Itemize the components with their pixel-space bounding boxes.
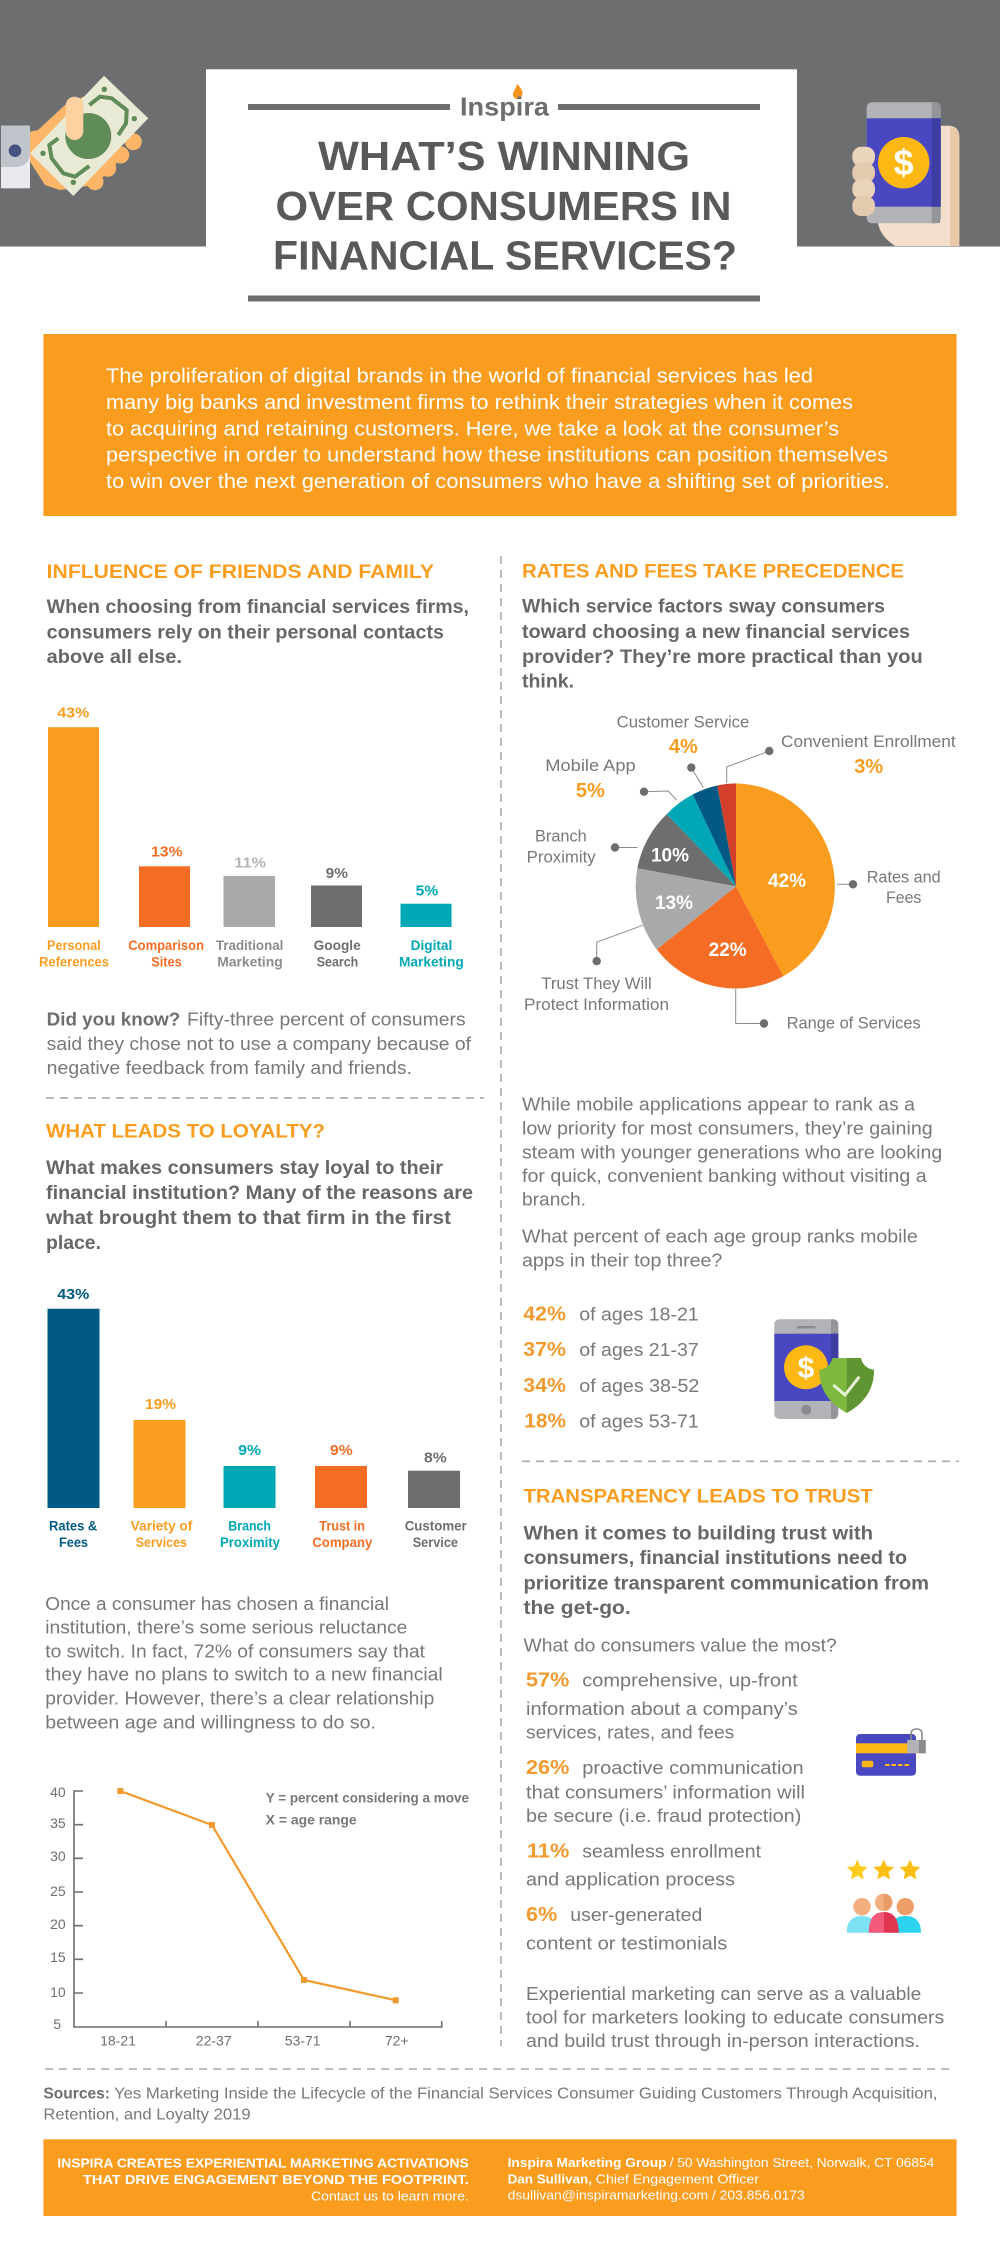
bar chart: loyalty reasons: Branch <box>228 1519 271 1534</box>
legend: Y = percent considering a move <box>266 1791 469 1806</box>
subheading: consumers rely on their personal contacts <box>47 622 444 643</box>
callout: customer service: 4% <box>669 736 698 758</box>
callout: range of services: Range of Services <box>787 1015 921 1033</box>
icon: hand holding phone: $ <box>894 142 914 183</box>
stat list: mobile app ranking by age <box>523 1304 699 1432</box>
line chart: percent considering a move by age: 72+ <box>385 2033 409 2049</box>
stat list: mobile app ranking by age: of ages 18-21 <box>579 1304 699 1325</box>
body text: reluctance to switch: Once a consumer has chosen a financial <box>45 1593 389 1614</box>
logo: Inspira: Inspira <box>460 92 550 122</box>
subheading: When it comes to building trust with <box>524 1523 873 1544</box>
icon: credit card with lock <box>856 1729 926 1776</box>
bar chart: influences: 9% <box>326 865 348 882</box>
subheading: consumers, financial institutions need to <box>524 1548 907 1569</box>
body text: mobile applications <box>522 1094 942 1271</box>
callout: mobile app: Mobile App <box>545 757 636 775</box>
title: FINANCIAL SERVICES? <box>273 232 737 278</box>
sources: Yes Marketing Inside the Lifecycle of the Financial Services Consumer Guiding Customers Through Acquisition, <box>114 2085 937 2102</box>
footer contact: Dan Sullivan, <box>508 2173 592 2187</box>
line chart: percent considering a move by age: 15 <box>50 1949 66 1965</box>
stat list: mobile app ranking by age: 34% <box>523 1375 566 1397</box>
stat list: what consumers value: 26% <box>526 1757 570 1779</box>
subheading: think. <box>522 672 574 693</box>
callout: rates and fees <box>837 868 941 907</box>
bar chart: loyalty reasons: 8% <box>424 1450 447 1467</box>
heading: WHAT LEADS TO LOYALTY? <box>46 1121 325 1143</box>
pie chart: service factors: 42% <box>768 871 806 892</box>
bar chart: influences: Digital <box>411 938 452 953</box>
callout: range of services <box>736 989 921 1033</box>
title <box>273 133 737 278</box>
sources <box>43 2085 937 2123</box>
panel: transparency leads to trust <box>524 1486 944 2051</box>
footer tagline: INSPIRA CREATES EXPERIENTIAL MARKETING ACTIVATIONS <box>57 2156 469 2170</box>
stat list: what consumers value: and application process <box>526 1869 735 1890</box>
callout: rates and fees: Fees <box>886 889 921 907</box>
intro panel <box>43 334 957 516</box>
bar chart: influences: 43% <box>57 705 89 722</box>
stat list: what consumers value: comprehensive, up-front <box>582 1670 798 1691</box>
callout: convenient enrollment: Convenient Enrollment <box>781 733 956 751</box>
bar chart: loyalty reasons: Customer <box>405 1519 467 1534</box>
intro panel: many big banks and investment firms to rethink their strategies when it comes <box>106 392 853 414</box>
subheading <box>522 597 923 693</box>
line chart: percent considering a move by age: 25 <box>50 1883 66 1899</box>
callout: branch proximity: Proximity <box>527 848 596 866</box>
icon: stars and people <box>847 1860 921 1933</box>
bar chart: influences: Marketing <box>399 955 464 970</box>
icon: phone with shield: $ <box>798 1352 815 1385</box>
heading: INFLUENCE OF FRIENDS AND FAMILY <box>47 561 434 583</box>
body text: reluctance to switch: they have no plans to switch to a new financial <box>45 1664 443 1685</box>
bar chart: loyalty reasons: Rates & <box>49 1519 98 1534</box>
bar chart: influences: Sites <box>151 955 182 970</box>
callout: convenient enrollment: 3% <box>854 756 883 778</box>
intro panel: to acquiring and retaining customers. Here, we take a look at the consumer’s <box>106 418 839 440</box>
bar chart: influences: Personal <box>47 938 101 953</box>
footer tagline: THAT DRIVE ENGAGEMENT BEYOND THE FOOTPRINT. <box>83 2173 469 2187</box>
intro panel: to win over the next generation of consumers who have a shifting set of priorities. <box>106 471 890 493</box>
callout: mobile app: 5% <box>576 780 605 802</box>
body text: mobile applications: steam with younger generations who are looking <box>522 1142 942 1163</box>
callout: trust they will protect information: Trust They Will <box>541 975 652 993</box>
callout: branch proximity <box>527 828 638 866</box>
panel: influence of friends and family <box>39 561 472 1078</box>
body text: mobile applications: for quick, convenient banking without visiting a <box>522 1165 927 1186</box>
bar chart: loyalty reasons: Service <box>413 1535 458 1550</box>
bar chart: influences: 13% <box>151 844 183 861</box>
bar chart: loyalty reasons: 9% <box>330 1442 353 1459</box>
line chart: percent considering a move by age: 20 <box>50 1916 66 1932</box>
stat list: what consumers value: 6% <box>526 1904 558 1926</box>
bar chart: loyalty reasons: 43% <box>57 1286 89 1303</box>
legend: X = age range <box>266 1813 357 1828</box>
did you know text: said they chose not to use a company because of <box>47 1033 472 1054</box>
line chart: percent considering a move by age: 22-37 <box>196 2033 232 2049</box>
body text: mobile applications: apps in their top three? <box>522 1250 722 1271</box>
subheading: prioritize transparent communication from <box>524 1573 929 1594</box>
stat list: what consumers value: content or testimonials <box>526 1932 727 1953</box>
pie chart: service factors <box>524 713 956 1033</box>
subheading <box>47 597 469 668</box>
bar chart: loyalty reasons <box>48 1286 467 1550</box>
bar chart: loyalty reasons: Proximity <box>220 1535 280 1550</box>
heading: TRANSPARENCY LEADS TO TRUST <box>524 1486 873 1508</box>
panel: what leads to loyalty <box>45 1121 473 2049</box>
callout: trust they will protect information: Protect Information <box>524 996 669 1014</box>
bar chart: loyalty reasons: 19% <box>145 1396 176 1413</box>
pie chart: service factors: 22% <box>709 940 747 961</box>
body text: experiential marketing <box>526 1983 944 2051</box>
bar chart: influences: 11% <box>234 854 266 871</box>
subheading: the get-go. <box>524 1598 631 1619</box>
callout: branch proximity: Branch <box>535 828 587 846</box>
line chart: percent considering a move by age: 10 <box>50 1984 66 2000</box>
did you know text: Fifty-three percent of consumers <box>187 1009 466 1030</box>
stat list: mobile app ranking by age: 18% <box>524 1410 566 1432</box>
bar chart: influences: Marketing <box>217 955 283 970</box>
stat list: what consumers value <box>526 1670 805 1953</box>
body text: mobile applications: What percent of each age group ranks mobile <box>522 1226 918 1247</box>
intro panel: perspective in order to understand how these institutions can position themselves <box>106 444 888 466</box>
header banner <box>0 0 1000 246</box>
line chart: percent considering a move by age: 30 <box>50 1848 66 1864</box>
body text: reluctance to switch: institution, there’s some serious reluctance <box>45 1616 407 1637</box>
legend <box>266 1791 469 1828</box>
stat list: what consumers value: 57% <box>526 1670 570 1692</box>
bar chart: influences: References <box>39 955 109 970</box>
callout: customer service: Customer Service <box>617 713 749 731</box>
callout: trust they will protect information <box>524 925 669 1014</box>
bar chart: influences <box>39 705 464 970</box>
stat list: what consumers value: 11% <box>527 1840 570 1862</box>
subheading: place. <box>46 1233 101 1254</box>
stat list: what consumers value: be secure (i.e. fraud protection) <box>526 1805 801 1826</box>
bar chart: loyalty reasons: Company <box>312 1535 373 1550</box>
subheading: above all else. <box>47 647 182 668</box>
stat list: mobile app ranking by age: 42% <box>523 1304 566 1326</box>
subheading: what brought them to that firm in the first <box>45 1208 452 1229</box>
body text: reluctance to switch <box>45 1593 443 1732</box>
footer contact: Chief Engagement Officer <box>596 2173 759 2187</box>
body text: mobile applications: branch. <box>522 1189 586 1210</box>
heading: RATES AND FEES TAKE PRECEDENCE <box>522 560 904 582</box>
footer contact <box>508 2156 934 2202</box>
bar chart: influences: Search <box>317 955 358 970</box>
icon: hand holding phone <box>852 102 959 246</box>
body text: reluctance to switch: provider. However, there’s a clear relationship <box>45 1688 434 1709</box>
bar chart: loyalty reasons: Services <box>136 1535 187 1550</box>
footer contact: dsullivan@inspiramarketing.com / 203.856.0173 <box>508 2188 805 2202</box>
subheading <box>524 1523 929 1619</box>
title: WHAT’S WINNING <box>318 133 690 179</box>
body text: reluctance to switch: between age and willingness to do so. <box>45 1711 376 1732</box>
sources: Retention, and Loyalty 2019 <box>43 2106 251 2123</box>
bar chart: loyalty reasons: Fees <box>59 1535 88 1550</box>
subheading: When choosing from financial services firms, <box>47 597 469 618</box>
stat list: mobile app ranking by age: of ages 21-37 <box>579 1339 699 1360</box>
did you know text <box>47 1009 472 1078</box>
icon: phone with shield <box>774 1319 874 1419</box>
footer panel <box>43 2139 957 2216</box>
bar chart: influences: Comparison <box>128 938 204 953</box>
subheading: Which service factors sway consumers <box>522 597 885 618</box>
pie chart: service factors: 13% <box>655 893 693 914</box>
bar chart: influences: 5% <box>416 882 438 900</box>
callout: customer service <box>617 713 749 788</box>
bar chart: influences: Traditional <box>216 938 283 953</box>
body text: experiential marketing: Experiential marketing can serve as a valuable <box>526 1983 921 2004</box>
line chart: percent considering a move by age: 35 <box>50 1815 66 1831</box>
callout: mobile app <box>545 757 677 802</box>
question text: What do consumers value the most? <box>524 1635 837 1656</box>
stat list: mobile app ranking by age: of ages 53-71 <box>579 1410 699 1431</box>
subheading: toward choosing a new financial services <box>522 622 910 643</box>
stat list: what consumers value: user-generated <box>570 1904 702 1925</box>
panel: rates and fees take precedence <box>522 560 956 1432</box>
footer contact: / 50 Washington Street, Norwalk, CT 06854 <box>670 2156 934 2170</box>
subheading: financial institution? Many of the reasons are <box>46 1183 473 1204</box>
title: OVER CONSUMERS IN <box>276 183 732 229</box>
stat list: what consumers value: seamless enrollment <box>582 1840 761 1861</box>
subheading: provider? They’re more practical than you <box>522 647 923 668</box>
intro panel: The proliferation of digital brands in the world of financial services has led <box>106 366 813 388</box>
line chart: percent considering a move by age: 18-21 <box>100 2033 136 2049</box>
body text: mobile applications: While mobile applications appear to rank as a <box>522 1094 916 1115</box>
body text: experiential marketing: and build trust through in-person interactions. <box>526 2030 920 2051</box>
footer contact: Inspira Marketing Group <box>508 2156 667 2170</box>
stat list: what consumers value: services, rates, and fees <box>526 1722 734 1743</box>
icon: hand holding cash <box>1 76 148 196</box>
stat list: what consumers value: proactive communication <box>582 1757 804 1778</box>
footer tagline <box>57 2156 469 2204</box>
bar chart: loyalty reasons: Variety of <box>131 1519 193 1534</box>
bar chart: influences: Google <box>314 938 361 953</box>
line chart: percent considering a move by age <box>50 1784 469 2049</box>
line chart: percent considering a move by age: 40 <box>50 1784 66 1800</box>
stat list: what consumers value: information about a company’s <box>526 1698 798 1719</box>
stat list: what consumers value: that consumers’ information will <box>526 1781 805 1802</box>
did you know text: Did you know? <box>47 1009 180 1030</box>
pie chart: service factors: 10% <box>651 846 689 867</box>
callout: rates and fees: Rates and <box>867 868 941 886</box>
body text: experiential marketing: tool for marketers looking to educate consumers <box>526 2007 944 2028</box>
line chart: percent considering a move by age: 5 <box>53 2016 61 2032</box>
stat list: mobile app ranking by age: of ages 38-52 <box>579 1375 699 1396</box>
line chart: percent considering a move by age: 53-71 <box>285 2033 321 2049</box>
subheading <box>45 1158 473 1254</box>
callout: convenient enrollment <box>727 733 956 783</box>
stat list: mobile app ranking by age: 37% <box>523 1339 566 1361</box>
bar chart: loyalty reasons: Trust in <box>319 1519 365 1534</box>
did you know text: negative feedback from family and friends. <box>47 1057 412 1078</box>
title card <box>206 69 797 316</box>
bar chart: loyalty reasons: 9% <box>238 1442 261 1459</box>
body text: mobile applications: low priority for most consumers, they’re gaining <box>522 1118 933 1139</box>
footer tagline: Contact us to learn more. <box>311 2190 469 2204</box>
subheading: What makes consumers stay loyal to their <box>46 1158 444 1179</box>
sources: Sources: <box>43 2085 110 2102</box>
body text: reluctance to switch: to switch. In fact, 72% of consumers say that <box>45 1640 425 1661</box>
